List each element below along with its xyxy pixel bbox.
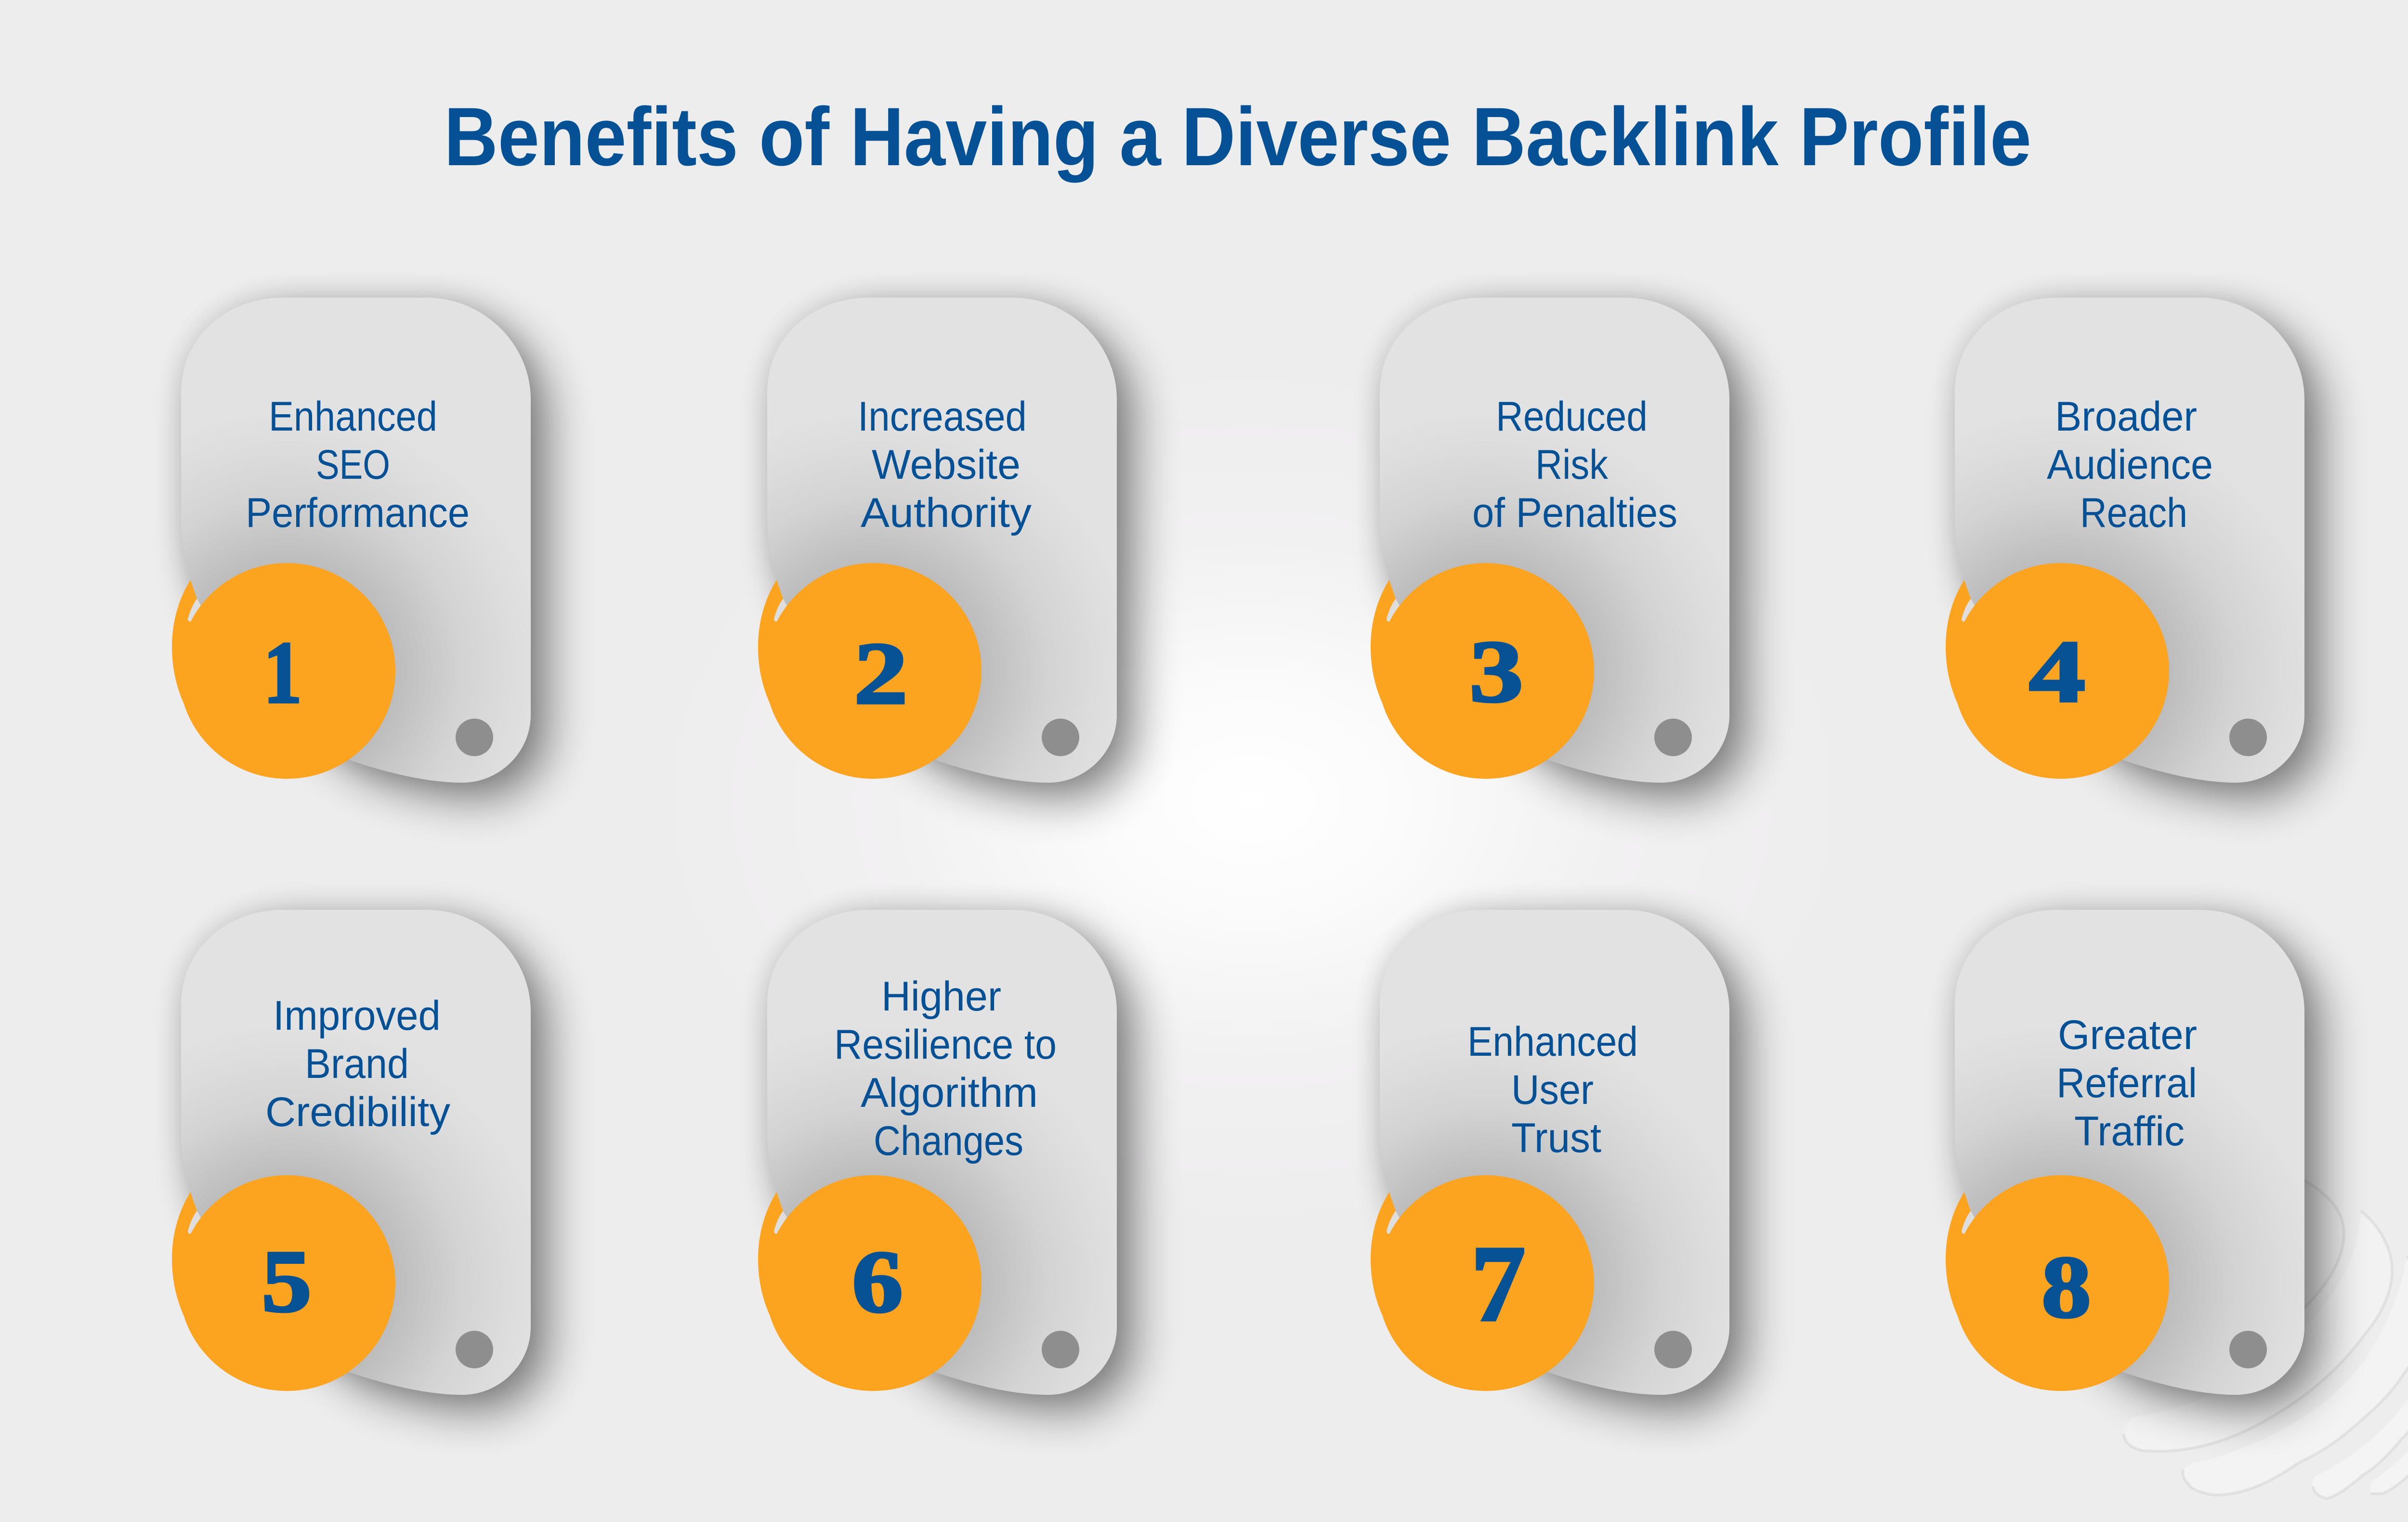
title: Benefits of Having a Diverse Backlink Profile [444,91,2031,183]
card 2: Increased Website Authority: Increased [858,394,1027,440]
card 1: Enhanced SEO Performance: 1 [263,623,302,722]
card 4: Broader Audience Reach: Reach [2080,490,2187,536]
card 8: Greater Referral Traffic: Greater [2058,1012,2197,1058]
card 5: Improved Brand Credibility: 5 [262,1232,312,1330]
card 8: Greater Referral Traffic: 8 [2042,1238,2091,1336]
card 7: Enhanced User Trust [1371,910,1748,1412]
card 5: Improved Brand Credibility [172,910,549,1412]
card 5: Improved Brand Credibility: Brand [305,1041,409,1087]
card 4: Broader Audience Reach: 4 [2029,622,2085,721]
card 6: Higher Resilience to Algorithm Changes: 6 [852,1233,903,1331]
card 3: Reduced Risk of Penalties: 3 [1469,622,1523,721]
card 7: Enhanced User Trust: Trust [1511,1115,1601,1161]
card 3: Reduced Risk of Penalties: Reduced [1496,394,1648,440]
card 6: Higher Resilience to Algorithm Changes: Resilience to [834,1022,1057,1068]
card 6: Higher Resilience to Algorithm Changes: Changes [874,1118,1023,1164]
card 4: Broader Audience Reach: Audience [2047,442,2213,488]
centre glow [626,337,1898,1252]
card 1: Enhanced SEO Performance: Performance [246,490,470,536]
card 7: Enhanced User Trust: Enhanced [1467,1019,1638,1065]
card 8: Greater Referral Traffic: Referral [2056,1060,2197,1106]
card 8: Greater Referral Traffic [1946,910,2323,1412]
card 8: Greater Referral Traffic: Traffic [2074,1108,2185,1155]
watermark swirl [2124,1180,2408,1498]
card 2: Increased Website Authority: Website [872,442,1021,488]
card 6: Higher Resilience to Algorithm Changes: Algorithm [861,1070,1038,1116]
card 4: Broader Audience Reach: Broader [2055,394,2197,440]
card 7: Enhanced User Trust: 7 [1471,1223,1526,1344]
card 1: Enhanced SEO Performance: SEO [316,442,390,488]
card 1: Enhanced SEO Performance: Enhanced [269,394,437,440]
card 7: Enhanced User Trust: User [1511,1067,1594,1113]
card 5: Improved Brand Credibility: Improved [273,993,441,1039]
card 4: Broader Audience Reach [1946,298,2323,800]
card 6: Higher Resilience to Algorithm Changes [758,910,1135,1412]
card 2: Increased Website Authority [758,298,1135,800]
card 1: Enhanced SEO Performance [172,298,549,800]
card 5: Improved Brand Credibility: Credibility [265,1089,450,1135]
card 2: Increased Website Authority: Authority [861,490,1032,536]
card 3: Reduced Risk of Penalties: Risk [1535,442,1609,488]
card 6: Higher Resilience to Algorithm Changes: Higher [881,973,1001,1020]
card 2: Increased Website Authority: 2 [854,624,908,722]
card 3: Reduced Risk of Penalties: of Penalties [1472,490,1677,536]
card 3: Reduced Risk of Penalties [1371,298,1748,800]
